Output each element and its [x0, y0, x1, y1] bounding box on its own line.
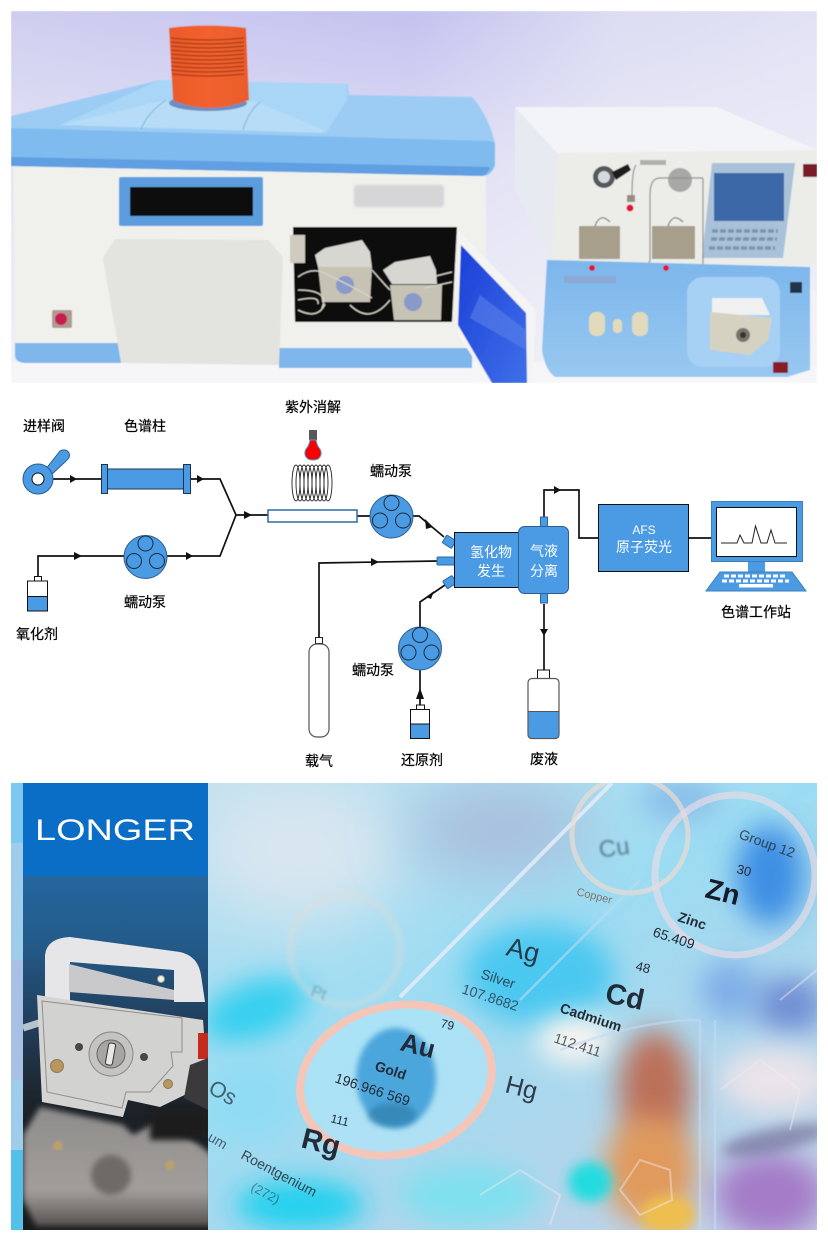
digestion coil	[292, 465, 332, 501]
tubing	[298, 270, 452, 314]
reductant label: 还原剂	[401, 752, 443, 768]
top photo: atomic fluorescence instrument	[11, 11, 817, 383]
carrier gas cylinder	[309, 638, 329, 737]
fittings	[589, 312, 605, 336]
element symbols: Cd	[603, 978, 647, 1017]
hydride column on lid	[169, 26, 249, 111]
element symbols: 30	[735, 861, 753, 879]
pump front face	[37, 995, 206, 1117]
raised lid plate	[60, 80, 348, 133]
peristaltic pump head	[712, 298, 770, 315]
icon: UV lamp	[305, 430, 321, 460]
droplet ring around gold	[296, 1000, 496, 1160]
element symbols: 196.966 569	[333, 1070, 412, 1109]
hydride generator	[437, 532, 520, 589]
carrier gas label: 载气	[305, 753, 333, 769]
tubing	[23, 1022, 42, 1028]
element symbols: 107.8682	[460, 981, 521, 1014]
compartment pump 2	[383, 256, 437, 284]
element symbols: Zinc	[676, 909, 709, 933]
peristaltic pump product photo	[23, 937, 212, 1226]
UV digestion label: 紫外消解	[285, 399, 341, 415]
switches	[773, 362, 788, 373]
pump compartment	[293, 227, 457, 322]
lid top surface	[11, 80, 496, 144]
open door	[466, 260, 526, 356]
chromatography column	[102, 464, 190, 494]
element symbols: (272)	[249, 1179, 282, 1207]
pump handle	[45, 937, 205, 1002]
peristaltic pump 1	[370, 495, 413, 538]
element symbols: Os	[205, 1075, 241, 1110]
element symbols: Cadmium	[558, 1000, 624, 1035]
pump heads	[579, 226, 620, 259]
blurred badge	[354, 185, 444, 207]
colour wash	[200, 780, 400, 920]
AFS detector	[598, 504, 688, 572]
oxidant bottle	[28, 576, 48, 611]
chromatography column label: 色谱柱	[124, 418, 166, 434]
lower blue unit	[542, 260, 810, 377]
element symbols: Zn	[703, 873, 743, 911]
pump 2 label: 蠕动泵	[124, 594, 166, 610]
element symbols: 65.409	[651, 924, 697, 952]
workstation label: 色谱工作站	[721, 604, 791, 620]
reductant bottle	[410, 705, 430, 738]
element symbols: Rg	[298, 1123, 344, 1163]
photo background	[11, 11, 817, 383]
AFS detector: 原子荧光	[616, 539, 672, 555]
chromatography pump unit	[515, 107, 817, 377]
instrument main body	[11, 80, 536, 383]
chromatography workstation computer	[706, 502, 806, 591]
element symbols	[204, 826, 797, 1207]
element symbols: um	[206, 1129, 230, 1152]
tubing and arrows	[38, 475, 712, 706]
waste bottle	[528, 670, 559, 738]
hydride generator: 发生	[477, 563, 505, 579]
element symbols: Group 12	[737, 826, 797, 861]
power switch	[803, 164, 817, 177]
gas-liquid separator	[518, 517, 568, 603]
pump reflection	[23, 1107, 212, 1226]
digestion tube	[268, 510, 357, 522]
display window	[119, 177, 263, 226]
front panel	[103, 239, 283, 365]
left edge strip	[11, 783, 23, 1230]
screen panel	[702, 163, 795, 258]
waste label: 废液	[530, 751, 558, 767]
indicator	[52, 310, 72, 328]
element symbols: Roentgenium	[239, 1147, 320, 1200]
element symbols: Au	[398, 1027, 438, 1064]
element symbols: Gold	[373, 1058, 408, 1083]
compartment pump 1	[315, 240, 372, 268]
element symbols: Cu	[597, 833, 631, 864]
AFS detector: AFS	[632, 523, 656, 537]
element symbols: 111	[329, 1111, 351, 1129]
element symbols: Hg	[503, 1071, 540, 1106]
LONGER brand panel: LONGER	[35, 814, 195, 847]
element symbols: 112.411	[552, 1030, 603, 1060]
peristaltic pump 2	[124, 536, 167, 578]
injection valve	[593, 166, 615, 188]
peristaltic pump 3	[398, 627, 442, 670]
glass lines and rings	[400, 783, 612, 997]
element symbols: 48	[634, 958, 652, 976]
gas-liquid separator: 分离	[530, 563, 558, 579]
element symbols: Ag	[504, 932, 543, 969]
bottom banner	[11, 777, 828, 1237]
hydride generator: 氢化物	[470, 544, 512, 560]
lid front band	[11, 128, 495, 176]
element symbols: Pt	[309, 983, 329, 1004]
injection valve	[23, 450, 70, 494]
red connector	[198, 1033, 208, 1059]
element symbols: Copper	[575, 886, 614, 907]
pump 3 label: 蠕动泵	[352, 662, 394, 678]
blue base	[15, 343, 121, 363]
second valve	[668, 168, 692, 192]
periodic table background	[208, 783, 817, 1230]
gas-liquid separator: 气液	[530, 543, 558, 559]
injection valve label: 进样阀	[23, 418, 65, 434]
LONGER brand panel	[23, 783, 208, 1230]
flow diagram	[16, 399, 806, 769]
element symbols: 79	[439, 1016, 456, 1033]
oxidant label: 氧化剂	[16, 626, 58, 642]
element symbols: Silver	[479, 966, 518, 992]
pump 1 label: 蠕动泵	[370, 463, 412, 479]
